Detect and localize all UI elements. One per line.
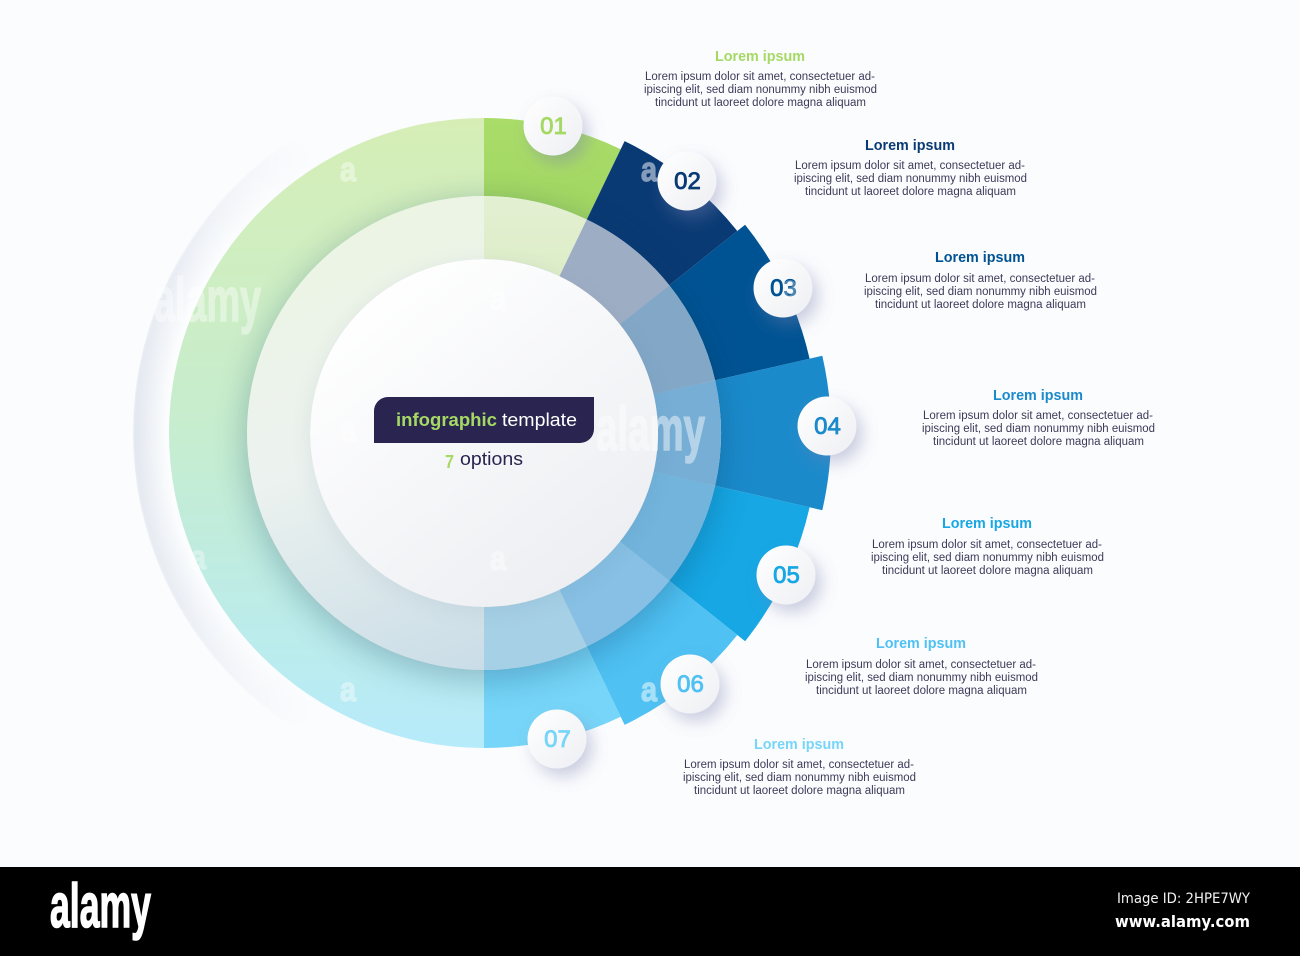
text block 05: tincidunt ut laoreet dolore magna aliquam [882, 565, 1093, 577]
text block 07 [683, 737, 916, 797]
circular diagram [169, 118, 831, 748]
option slices [484, 118, 831, 748]
text block 04: Lorem ipsum [993, 388, 1083, 404]
text block 02: ipiscing elit, sed diam nonummy nibh euismod [794, 173, 1027, 185]
text block 05: ipiscing elit, sed diam nonummy nibh euismod [871, 552, 1104, 564]
watermarks: a [782, 269, 799, 307]
middle ring [247, 196, 721, 670]
text block 03: tincidunt ut laoreet dolore magna aliquam [875, 299, 1086, 311]
text block 02 [794, 138, 1027, 198]
text block 06: tincidunt ut laoreet dolore magna aliquam [816, 685, 1027, 697]
number badge 05: 05 [773, 562, 800, 589]
watermarks: a [340, 151, 357, 189]
number badge 03: 03 [770, 275, 797, 302]
text block 03: Lorem ipsum [935, 250, 1025, 266]
watermarks: a [490, 540, 507, 578]
text block 04: tincidunt ut laoreet dolore magna aliquam [933, 436, 1144, 448]
center disc [310, 259, 658, 607]
text block 06: ipiscing elit, sed diam nonummy nibh euismod [805, 672, 1038, 684]
number badge 02: 02 [674, 168, 701, 195]
text block 01 [644, 49, 877, 109]
number badge 06 [660, 654, 720, 714]
number badge 06: 06 [677, 671, 704, 698]
watermarks: alamy [154, 266, 261, 335]
center title banner: template [502, 409, 577, 430]
text block 06: Lorem ipsum dolor sit amet, consectetuer ad- [806, 659, 1036, 671]
watermarks: a [340, 671, 357, 709]
watermarks: a [641, 151, 658, 189]
watermarks: a [340, 411, 357, 449]
text block 07: Lorem ipsum dolor sit amet, consectetuer ad- [684, 759, 914, 771]
watermarks: a [190, 539, 207, 577]
text block 07: tincidunt ut laoreet dolore magna aliquam [694, 785, 905, 797]
watermarks: a [490, 280, 507, 318]
footer bar: www.alamy.com [1115, 912, 1250, 931]
halo crescent [133, 190, 236, 676]
text block 03 [864, 250, 1097, 311]
footer bar: alamy [50, 872, 151, 941]
center subtitle: 7 [445, 452, 454, 472]
number badge 05 [756, 546, 816, 604]
text block 02: Lorem ipsum dolor sit amet, consectetuer ad- [795, 160, 1025, 172]
text block 04: ipiscing elit, sed diam nonummy nibh euismod [922, 423, 1155, 435]
number badge 04 [798, 396, 856, 456]
number badge 07: 07 [544, 726, 571, 753]
text block 04: Lorem ipsum dolor sit amet, consectetuer ad- [923, 410, 1153, 422]
center title banner: infographic [396, 409, 497, 430]
text block 02: Lorem ipsum [865, 138, 955, 154]
footer bar [0, 867, 1300, 956]
watermarks [154, 151, 799, 709]
center subtitle: options [460, 449, 523, 469]
number badge 01 [524, 96, 582, 156]
center subtitle [445, 449, 523, 472]
text block 05: Lorem ipsum [942, 516, 1032, 532]
number badge 02 [658, 152, 716, 210]
text block 06: Lorem ipsum [876, 636, 966, 652]
number badge 03 [754, 258, 812, 318]
text block 05 [871, 516, 1104, 577]
footer bar: Image ID: 2HPE7WY [1117, 891, 1250, 907]
text block 02: tincidunt ut laoreet dolore magna aliquam [805, 186, 1016, 198]
text block 06 [805, 636, 1038, 697]
text block 01: ipiscing elit, sed diam nonummy nibh euismod [644, 84, 877, 96]
text block 03: ipiscing elit, sed diam nonummy nibh euismod [864, 286, 1097, 298]
text block 07: Lorem ipsum [754, 737, 844, 753]
text block 01: Lorem ipsum dolor sit amet, consectetuer ad- [645, 71, 875, 83]
text block 05: Lorem ipsum dolor sit amet, consectetuer ad- [872, 539, 1102, 551]
text block 07: ipiscing elit, sed diam nonummy nibh euismod [683, 772, 916, 784]
text block 04 [922, 388, 1155, 448]
watermarks: a [641, 671, 658, 709]
number badge 01: 01 [540, 113, 567, 140]
watermarks: alamy [596, 395, 705, 464]
center title banner [374, 397, 594, 443]
outer ring left half [169, 118, 484, 748]
number badge 07 [528, 710, 586, 768]
text block 01: Lorem ipsum [715, 49, 805, 65]
number badge 04: 04 [814, 413, 841, 440]
text block 01: tincidunt ut laoreet dolore magna aliquam [655, 97, 866, 109]
text block 03: Lorem ipsum dolor sit amet, consectetuer ad- [865, 273, 1095, 285]
